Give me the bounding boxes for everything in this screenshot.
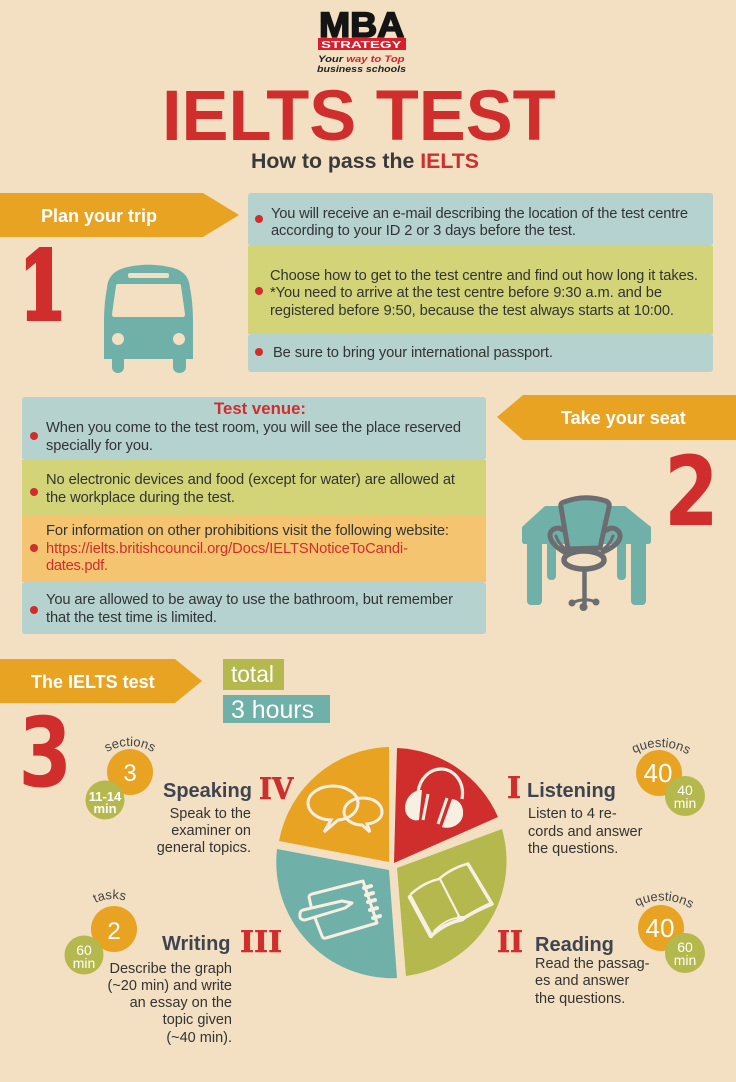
info row: e-mail [248,193,713,246]
speaking description [157,806,251,856]
tasks badge: min [73,955,95,971]
writing description: topic given [163,1012,232,1028]
questions badge [636,892,705,973]
icon: bus [104,265,193,373]
arrow banner: Take your seat [497,395,736,440]
questions badge: 40 [646,913,674,943]
pie segment: listening [394,748,498,863]
arrow banner: Take your seat: Take your seat [561,408,686,428]
info row: bathroom: that the test time is limited. [46,610,217,626]
writing description: (~20 min) and write [107,978,232,994]
info row: reserved place [22,397,486,460]
reading description [535,956,650,1007]
listening description: cords and answer [528,824,643,840]
icon: headphones [405,769,463,828]
info row: devices and food: No electronic devices and food (except for water) are allowed at [46,472,455,488]
info row: getting to the centre [248,246,713,334]
logo: MBA Strategy: STRATEGY [321,39,402,50]
listening description [528,806,643,857]
questions badge: min [674,795,696,811]
logo: MBA Strategy: MBA [319,5,404,45]
total duration value: 3 hours [231,696,314,724]
info row: bathroom [22,582,486,634]
pie segment: writing [276,849,397,978]
writing description: an essay on the [130,995,232,1011]
pie segment: reading [397,829,507,976]
numeral II: II [497,924,523,959]
section: speaking [86,736,294,856]
info row: getting to the centre: registered before 9:50, because the test always starts at 10:00. [270,303,674,319]
section: writing [64,889,282,1046]
speaking description: general topics. [157,840,251,856]
info row: reserved place: specially for you. [46,438,153,454]
numeral I: I [507,771,521,806]
reading description: Read the passag- [535,956,650,972]
tasks badge: 2 [107,918,121,945]
logo: MBA Strategy [317,5,407,75]
sections count badge: 11-14 [89,789,122,804]
arrow banner: Plan your trip: Plan your trip [41,206,157,226]
info row: bathroom: You are allowed to be away to use the bathroom, but remember [46,592,453,608]
info row: getting to the centre: *You need to arrive at the test centre before 9:30 a.m. and be [270,285,662,301]
info row: getting to the centre: Choose how to get to the test centre and find out how long it takes. [270,268,698,284]
tasks badge: tasks [92,889,126,902]
icon: notebook and pencil [300,881,380,938]
info row: reserved place: Test venue: [214,399,306,418]
icon: open book [410,864,492,936]
total duration label: total [231,661,274,687]
tasks badge [64,889,137,974]
questions badge: 40 [644,758,672,788]
numeral IV: IV [259,771,294,806]
arrow banner: The IELTS test: The IELTS test [31,672,155,692]
section: listening [507,738,705,857]
questions badge: 40 [677,782,693,798]
questions badge: 60 [677,939,693,955]
step number 3: 3 [18,697,72,809]
listening description: the questions. [528,841,618,857]
pie segment: speaking [279,747,389,862]
step number 1: 1 [20,232,66,341]
heading: listening: Listening [527,780,616,802]
info row: e-mail: according to your ID 2 or 3 days before the test. [271,223,576,239]
panel: test venue [22,397,486,634]
writing description [107,961,232,1046]
info row: passport [248,334,713,372]
sections count badge [86,736,155,820]
sections count badge: 3 [123,760,137,787]
info row: prohibitions link: https://ielts.britishcouncil.org/Docs/IELTSNoticeToCandi- [46,541,408,557]
heading: speaking: Speaking [163,780,252,802]
info row: passport: Be sure to bring your international passport. [273,345,553,361]
writing description: (~40 min). [166,1030,232,1046]
heading: reading: Reading [535,934,614,956]
info row: devices and food: the workplace during the test. [46,490,235,506]
heading: writing: Writing [162,933,231,955]
pie chart: four test sections [276,747,507,978]
sections count badge: min [93,801,117,816]
sections count badge: sections [105,736,155,752]
info row: devices and food [22,460,486,516]
arrow banner: The IELTS test [0,659,202,703]
total duration label [223,659,284,690]
icon: speech bubbles [308,786,382,832]
title: IELTS TEST [162,76,556,156]
info row: e-mail: You will receive an e-mail describing the location of the test centre [271,206,688,222]
logo: MBA Strategy: business schools [317,65,407,75]
tasks badge: 60 [76,942,92,958]
listening description: Listen to 4 re- [528,806,617,822]
panel: plan your trip details [248,193,713,372]
writing description: Describe the graph [109,961,232,977]
speaking description: Speak to the [170,806,251,822]
reading description: es and answer [535,973,629,989]
info row: reserved place: When you come to the test room, you will see the place reserved [46,420,461,436]
info row: prohibitions link: For information on other prohibitions visit the following website: [46,523,449,539]
reading description: the questions. [535,991,625,1007]
info row: prohibitions link [22,516,486,582]
questions badge: min [674,952,696,968]
numeral III: III [240,925,282,960]
speaking description: examiner on [171,823,251,839]
subtitle: How to pass the IELTS [251,149,479,173]
questions badge [632,738,705,816]
logo: MBA Strategy: Your way to Top [318,55,405,65]
arrow banner: Plan your trip [0,193,239,237]
info row: prohibitions link: dates.pdf. [46,558,108,574]
icon: desk and chair [522,498,651,610]
questions badge: questions [632,738,690,754]
section: reading [497,892,705,1007]
step number 2: 2 [664,436,719,548]
questions badge: questions [636,892,693,908]
